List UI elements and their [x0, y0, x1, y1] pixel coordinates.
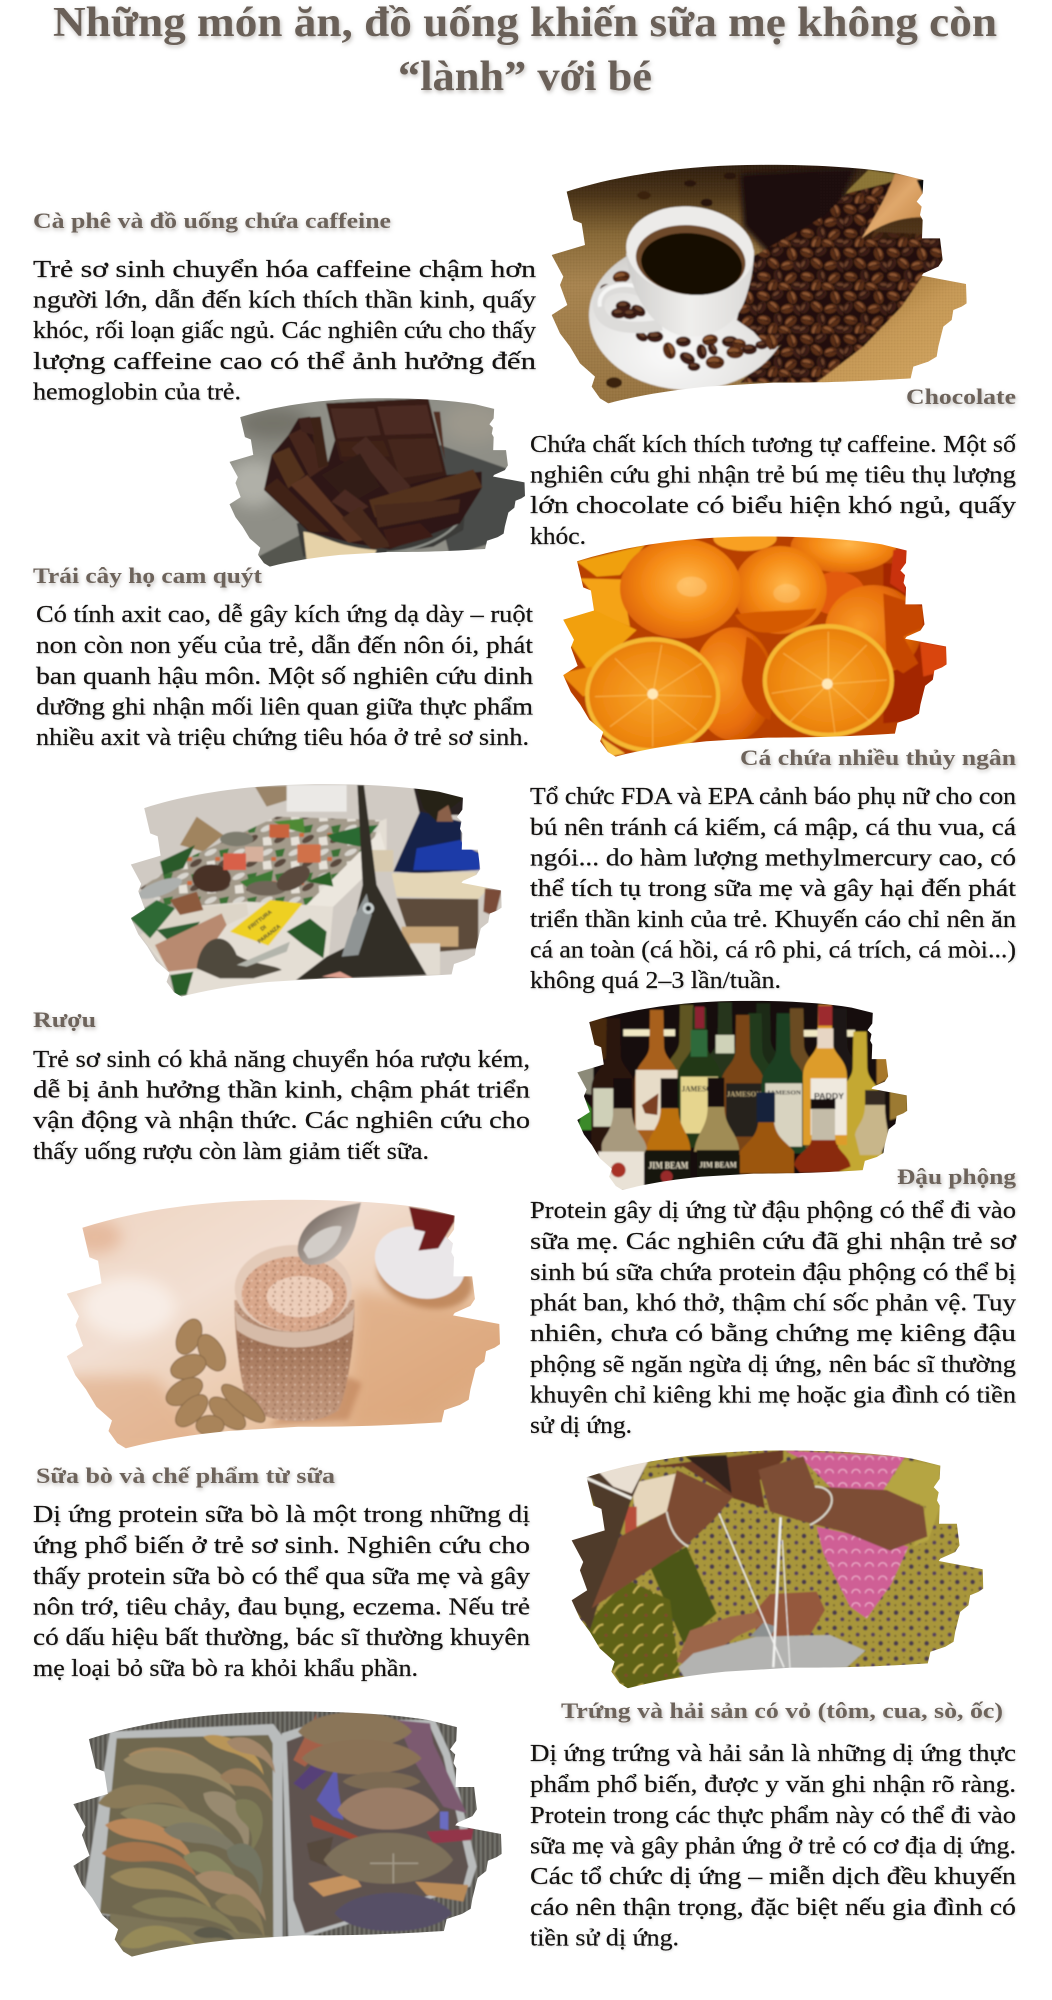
text block: cow milk: có dấu hiệu bất thường, bác sĩ thường khuyên	[33, 1624, 530, 1651]
text block: fish: ngói... do hàm lượng methylmercury cao, có	[530, 844, 1016, 872]
text block: citrus: dưỡng ghi nhận mối liên quan giữa thực phẩm	[36, 694, 533, 720]
photo: fish market with swordfish: PARANZA	[257, 924, 282, 945]
text block: peanuts	[530, 1197, 1017, 1439]
text block: alcohol: thấy uống rượu còn làm giảm tiết sữa.	[33, 1138, 429, 1165]
text block: peanuts: sinh bú sữa chứa protein đậu phộng có thể bị	[530, 1259, 1016, 1286]
heading: alcohol: Rượu	[33, 1007, 96, 1032]
text block: peanuts: sữa mẹ. Các nghiên cứu đã ghi nhận trẻ sơ	[530, 1228, 1017, 1255]
text block: chocolate: khóc.	[530, 523, 586, 550]
text block: coffee: người lớn, dẫn đến kích thích thần kinh, quấy	[33, 286, 537, 314]
text block: coffee: Trẻ sơ sinh chuyển hóa caffeine chậm hơn	[33, 256, 536, 283]
text block: cow milk: nôn trớ, tiêu chảy, đau bụng, eczema. Nếu trẻ	[33, 1594, 530, 1620]
text block: eggs and shellfish: sữa mẹ và gây phản ứng ở trẻ có cơ địa dị ứng.	[530, 1832, 1016, 1860]
text block: peanuts: nhiên, chưa có bằng chứng mẹ kiêng đậu	[530, 1320, 1016, 1347]
text block: fish: cá an toàn (cá hồi, cá rô phi, cá trích, cá mòi...)	[530, 936, 1016, 964]
text block: coffee	[33, 256, 537, 406]
photo: chocolate bars	[230, 398, 525, 566]
text block: eggs and shellfish: tiền sử dị ứng.	[530, 1924, 679, 1952]
text block: eggs and shellfish: Các tổ chức dị ứng – miễn dịch đều khuyến	[530, 1863, 1016, 1890]
text block: cow milk	[33, 1501, 531, 1682]
heading: coffee: Cà phê và đồ uống chứa caffeine	[33, 208, 391, 233]
text block: eggs and shellfish	[530, 1740, 1016, 1952]
text block: eggs and shellfish: Protein trong các thực phẩm này có thể đi vào	[530, 1802, 1016, 1829]
text block: fish	[530, 783, 1016, 994]
text block: alcohol: Trẻ sơ sinh có khả năng chuyển hóa rượu kém,	[33, 1046, 530, 1073]
text block: peanuts: sử dị ứng.	[530, 1412, 632, 1439]
text block: citrus: nhiều axit và triệu chứng tiêu hóa ở trẻ sơ sinh.	[36, 724, 529, 751]
text block: coffee: khóc, rối loạn giấc ngủ. Các nghiên cứu cho thấy	[33, 317, 537, 344]
text block: chocolate	[530, 431, 1017, 550]
heading: cow milk: Sữa bò và chế phẩm từ sữa	[36, 1463, 335, 1488]
photo: shrimp and crabs in trays	[74, 1712, 502, 1957]
text block: cow milk: thấy protein sữa bò có thể qua sữa mẹ và gây	[33, 1563, 531, 1590]
photo: liquor bottles: JIM BEAM	[648, 1160, 689, 1170]
text block: citrus: ban quanh hậu môn. Một số nghiên cứu dinh	[36, 663, 533, 690]
photo: coffee cup and beans	[540, 160, 980, 410]
heading: eggs and shellfish: Trứng và hải sản có vỏ (tôm, cua, sò, ốc)	[561, 1698, 1003, 1723]
photo: fish market with swordfish: FRITTURA	[247, 909, 273, 932]
text block: peanuts: phát ban, khó thở, thậm chí sốc phản vệ. Tuy	[530, 1290, 1017, 1316]
text block: fish: Tổ chức FDA và EPA cảnh báo phụ nữ cho con	[530, 783, 1016, 810]
photo: fish market with swordfish: DI	[260, 924, 268, 933]
heading: high-mercury fish: Cá chứa nhiều thủy ngân	[740, 745, 1017, 770]
title: “lành” với bé	[398, 54, 652, 100]
text block: chocolate: Chứa chất kích thích tương tự caffeine. Một số	[530, 431, 1016, 458]
title	[53, 0, 997, 100]
photo: liquor bottles: PADDY	[814, 1092, 845, 1101]
text block: alcohol: dễ bị ảnh hưởng thần kinh, chậm phát triển	[33, 1076, 530, 1104]
text block: eggs and shellfish: Dị ứng trứng và hải sản là những dị ứng thực	[530, 1740, 1016, 1767]
text block: citrus	[36, 601, 533, 751]
text block: cow milk: ứng phổ biến ở trẻ sơ sinh. Nghiên cứu cho	[33, 1532, 530, 1559]
photo: liquor bottles: JAMESON	[682, 1085, 717, 1094]
text block: fish: bú nên tránh cá kiếm, cá mập, cá thu vua, cá	[530, 814, 1016, 841]
text block: alcohol: vận động và nhận thức. Các nghiên cứu cho	[33, 1107, 530, 1134]
text block: coffee: hemoglobin của trẻ.	[33, 378, 241, 406]
text block: cow milk: Dị ứng protein sữa bò là một trong những dị	[33, 1501, 530, 1528]
text block: fish: triển thần kinh của trẻ. Khuyến cáo chỉ nên ăn	[530, 906, 1016, 933]
text block: citrus: non còn non yếu của trẻ, dẫn đến nôn ói, phát	[36, 632, 533, 659]
photo: liquor bottles: JAMESON	[727, 1091, 761, 1099]
photo: liquor bottles: JIM BEAM	[699, 1160, 737, 1170]
text block: chocolate: lớn chocolate có biểu hiện khó ngủ, quấy	[530, 492, 1017, 519]
heading: citrus: Trái cây họ cam quýt	[33, 563, 263, 588]
photo: hand milking a cow	[570, 1440, 987, 1690]
text block: fish: không quá 2–3 lần/tuần.	[530, 967, 781, 994]
photo: fish market with swordfish	[130, 784, 502, 996]
photo: peanut powder jar	[66, 1200, 500, 1448]
text block: fish: thể tích tụ trong sữa mẹ và gây hại đến phát	[530, 875, 1016, 902]
photo: liquor bottles	[577, 1000, 908, 1190]
text block: alcohol	[33, 1046, 530, 1165]
text block: peanuts: Protein gây dị ứng từ đậu phộng có thể đi vào	[530, 1197, 1016, 1224]
photo: oranges	[563, 536, 947, 757]
title: Những món ăn, đồ uống khiến sữa mẹ không còn	[53, 0, 997, 46]
heading: chocolate: Chocolate	[906, 384, 1016, 409]
text block: chocolate: nghiên cứu ghi nhận trẻ bú mẹ tiêu thụ lượng	[530, 462, 1016, 488]
heading: peanuts: Đậu phộng	[897, 1164, 1017, 1189]
text block: citrus: Có tính axit cao, dễ gây kích ứng dạ dày – ruột	[36, 601, 533, 628]
text block: peanuts: khuyên chỉ kiêng khi mẹ hoặc gia đình có tiền	[530, 1382, 1016, 1408]
text block: cow milk: mẹ loại bỏ sữa bò ra khỏi khẩu phần.	[33, 1655, 418, 1682]
photo: liquor bottles: JAMESON	[767, 1089, 801, 1096]
text block: peanuts: phộng sẽ ngăn ngừa dị ứng, nên bác sĩ thường	[530, 1351, 1016, 1378]
text block: eggs and shellfish: cáo nên thận trọng, đặc biệt nếu gia đình có	[530, 1894, 1016, 1921]
text block: coffee: lượng caffeine cao có thể ảnh hưởng đến	[33, 348, 536, 375]
text block: eggs and shellfish: phẩm phổ biến, được y văn ghi nhận rõ ràng.	[530, 1771, 1016, 1798]
